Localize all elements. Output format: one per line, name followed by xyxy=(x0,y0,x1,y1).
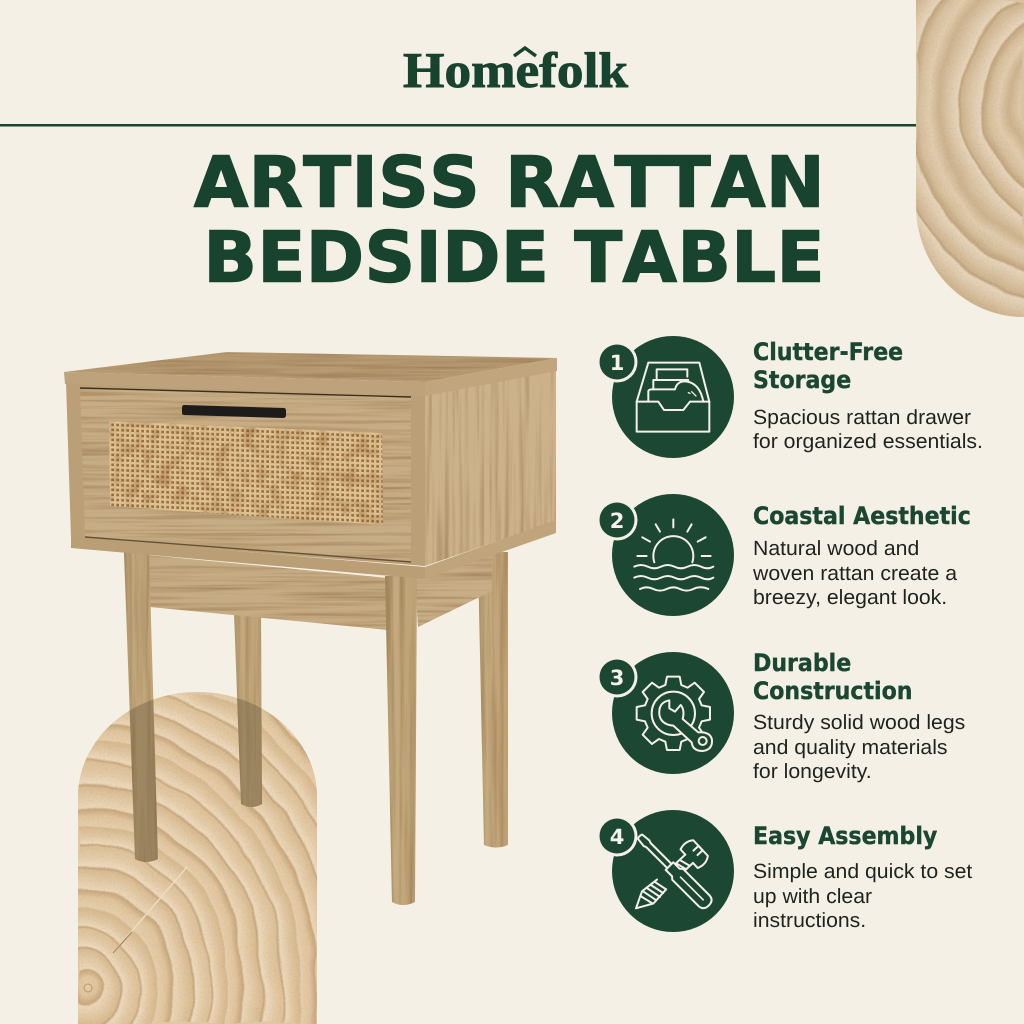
heading: Clutter-Free xyxy=(753,338,903,366)
number badge 2 xyxy=(596,500,638,540)
heading: Easy Assembly xyxy=(753,822,938,850)
rattan panel xyxy=(109,421,383,525)
back legs xyxy=(234,552,508,848)
heading xyxy=(753,338,903,394)
number badge 4: 4 xyxy=(610,825,624,849)
front legs xyxy=(124,552,417,905)
description xyxy=(753,860,973,932)
number badge 1 xyxy=(596,342,638,382)
drawer shadow gaps xyxy=(80,388,411,562)
icon: sun over waves xyxy=(612,494,734,616)
heading: Construction xyxy=(753,677,913,705)
icon: screwdriver and screw xyxy=(612,810,734,932)
description: breezy, elegant look. xyxy=(753,586,947,609)
drawer front xyxy=(80,388,411,562)
title xyxy=(194,142,825,298)
description: Simple and quick to set xyxy=(753,860,973,883)
heading xyxy=(753,649,913,705)
feature 1: Clutter-Free Storage xyxy=(596,336,983,458)
table top side edge xyxy=(425,358,557,396)
description: Natural wood and xyxy=(753,537,919,560)
wood corner panel xyxy=(916,0,1024,317)
feature 4: Easy Assembly xyxy=(596,810,973,932)
description: woven rattan create a xyxy=(752,562,958,585)
description: Spacious rattan drawer xyxy=(753,406,971,429)
description: Sturdy solid wood legs xyxy=(753,711,965,734)
wood arch panel xyxy=(78,692,318,1024)
number badge 2: 2 xyxy=(610,509,624,533)
table top surface xyxy=(64,352,557,382)
title: BEDSIDE TABLE xyxy=(204,216,825,298)
feature 3: Durable Construction xyxy=(596,649,965,783)
number badge 1: 1 xyxy=(610,351,624,375)
bottom rail xyxy=(71,520,556,579)
description xyxy=(753,711,965,783)
cabinet right side xyxy=(425,371,556,566)
feature 2: Coastal Aesthetic xyxy=(596,494,971,616)
number badge 3 xyxy=(596,656,638,698)
description: for longevity. xyxy=(753,760,872,783)
description: instructions. xyxy=(753,909,866,932)
heading: Durable xyxy=(753,649,851,677)
apron rails xyxy=(148,555,492,630)
description: for organized essentials. xyxy=(753,430,983,453)
number badge 3: 3 xyxy=(610,666,624,690)
drawer handle xyxy=(182,405,286,418)
description: and quality materials xyxy=(753,736,948,759)
description xyxy=(752,537,958,609)
product photo: rattan bedside table xyxy=(64,352,557,905)
header divider line xyxy=(0,124,916,126)
cabinet front frame xyxy=(66,382,425,566)
icon: storage tray xyxy=(612,336,734,458)
leg shadow over wood arch xyxy=(130,698,262,862)
title: ARTISS RATTAN xyxy=(194,142,825,224)
heading: Coastal Aesthetic xyxy=(753,502,971,530)
heading: Storage xyxy=(753,366,851,394)
number badge 4 xyxy=(596,816,638,856)
brand logo: Homefolk: Homefolk xyxy=(403,42,628,98)
description xyxy=(753,406,983,453)
description: up with clear xyxy=(753,885,872,908)
table top front edge xyxy=(64,372,425,396)
icon: gear and wrench xyxy=(612,652,734,774)
